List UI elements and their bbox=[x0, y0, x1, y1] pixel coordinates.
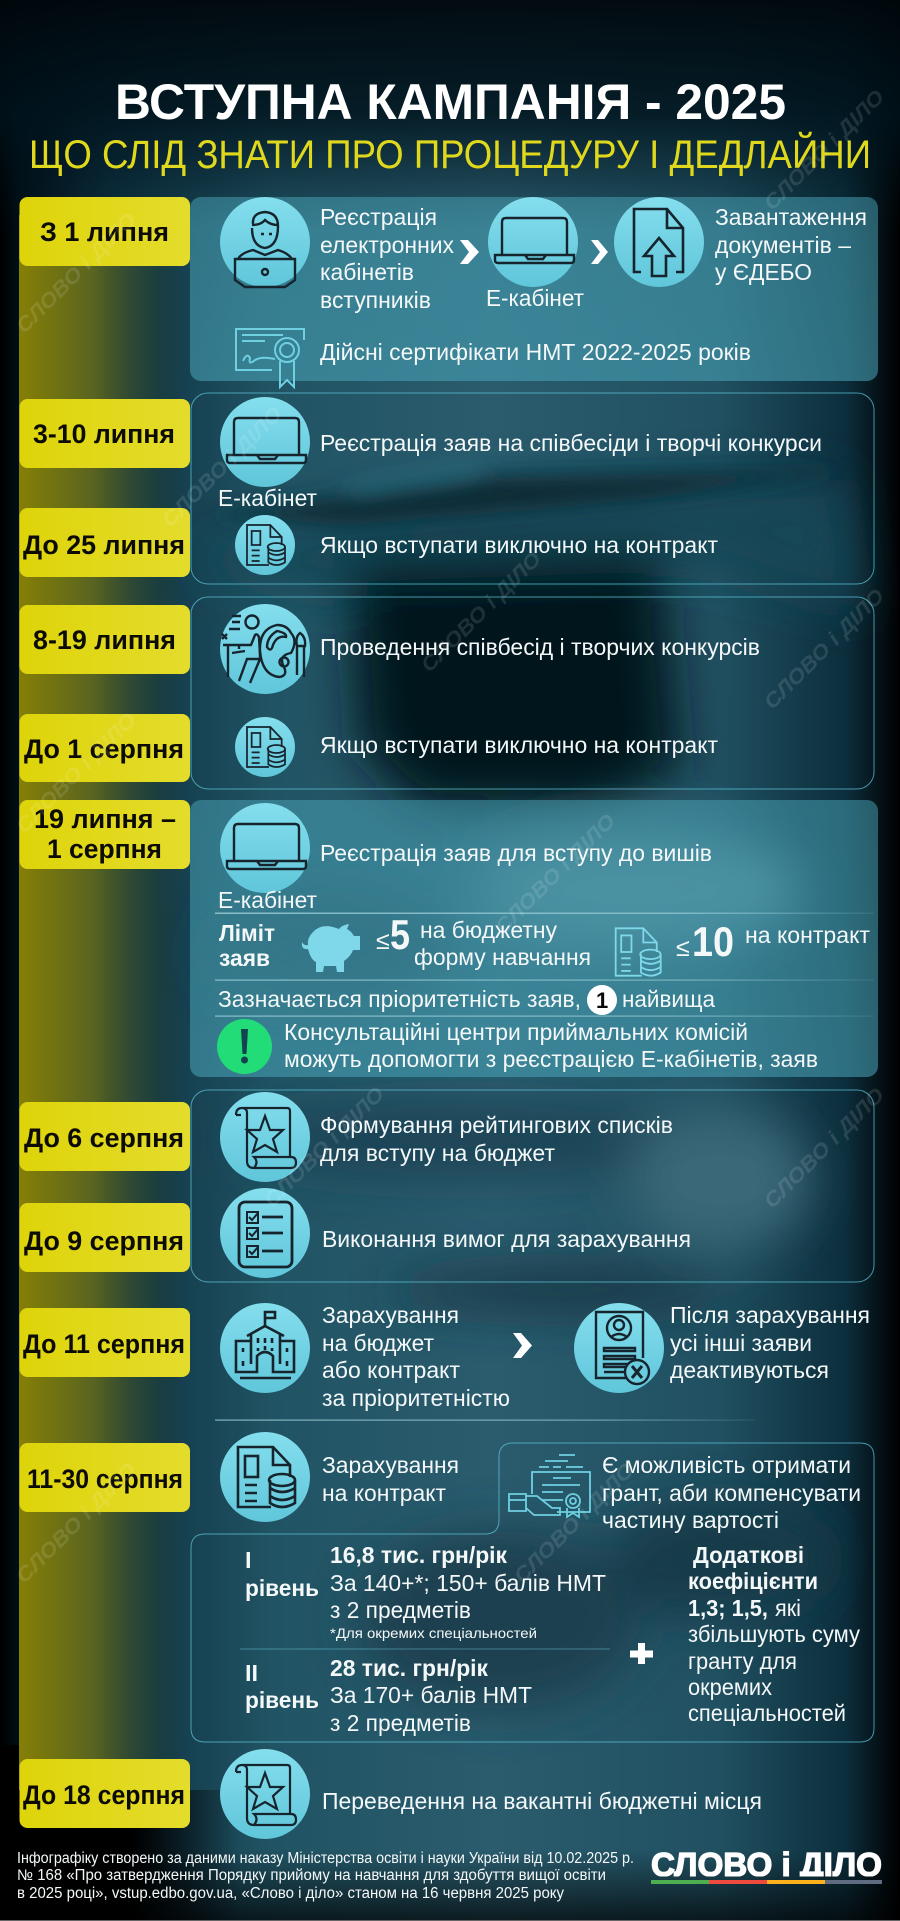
level I: *Для окремих спеціальностей bbox=[330, 1625, 537, 1641]
additional coefficients text: Додаткові bbox=[693, 1542, 804, 1568]
level II bbox=[245, 1655, 532, 1736]
icon: interview and creative contest bbox=[220, 604, 310, 694]
icon: transfer scroll bbox=[220, 1749, 310, 1839]
deactivation text: Після зарахування bbox=[670, 1302, 870, 1328]
priority note: Зазначається пріоритетність заяв, bbox=[218, 986, 581, 1012]
limit: contract: ≤ bbox=[676, 934, 690, 962]
icon: e-cabinet laptop bbox=[220, 397, 310, 487]
ranking text: Формування рейтингових списків bbox=[320, 1112, 673, 1138]
grant text: грант, аби компенсувати bbox=[602, 1480, 861, 1506]
date pills bbox=[20, 197, 190, 1828]
enrolment text: або контракт bbox=[322, 1357, 460, 1383]
divider bbox=[215, 1420, 755, 1421]
watermarks: СЛОВО і ДІЛО bbox=[12, 709, 141, 838]
date labels: 11-30 серпня bbox=[27, 1464, 183, 1494]
deactivation text: деактивуються bbox=[670, 1357, 829, 1383]
date labels: До 25 липня bbox=[23, 530, 185, 560]
requirements text: Виконання вимог для зарахування bbox=[322, 1226, 691, 1252]
dark lower-left corner bbox=[0, 1745, 900, 1921]
registration text: вступників bbox=[320, 287, 431, 313]
icon: checklist bbox=[220, 1188, 310, 1278]
university application text: Реєстрація заяв для вступу до вишів bbox=[320, 840, 712, 866]
icon: university building bbox=[220, 1303, 310, 1393]
grant text bbox=[602, 1452, 861, 1533]
registration text bbox=[320, 204, 454, 313]
contract text: Якщо вступати виключно на контракт bbox=[320, 732, 718, 758]
icon: deactivated application bbox=[574, 1303, 664, 1393]
application limit label: заяв bbox=[219, 945, 270, 971]
priority note: найвища bbox=[622, 986, 716, 1012]
footer source text: в 2025 році», vstup.edbo.gov.ua, «Слово і діло» станом на 16 червня 2025 року bbox=[17, 1885, 564, 1902]
upload text: у ЄДЕБО bbox=[715, 259, 812, 285]
watermarks: СЛОВО і ДІЛО bbox=[760, 1084, 889, 1213]
deactivation text: усі інші заяви bbox=[670, 1330, 812, 1356]
date labels: До 18 серпня bbox=[23, 1780, 185, 1810]
watermarks: СЛОВО і ДІЛО bbox=[510, 1459, 639, 1588]
enrolment text bbox=[322, 1302, 510, 1411]
arrow bbox=[591, 240, 608, 264]
registration text: кабінетів bbox=[320, 259, 414, 285]
budget text: форму навчання bbox=[414, 944, 591, 970]
date labels: До 9 серпня bbox=[24, 1226, 184, 1256]
grant text: Є можливість отримати bbox=[602, 1452, 851, 1478]
date labels: 8-19 липня bbox=[33, 625, 176, 655]
enrolment text: за пріоритетністю bbox=[322, 1385, 510, 1411]
budget text bbox=[414, 917, 591, 970]
footer source text: Інфографіку створено за даними наказу Міністерства освіти і науки України від 10.02.2025 р. bbox=[17, 1850, 634, 1867]
yellow timeline column bbox=[19, 215, 184, 1790]
date labels: 3-10 липня bbox=[33, 419, 175, 449]
contract limit text: на контракт bbox=[745, 922, 870, 948]
footer source text: № 168 «Про затвердження Порядку прийому на навчання для здобуття вищої освіти bbox=[17, 1867, 606, 1884]
creative contest text: Проведення співбесід і творчих конкурсів bbox=[320, 634, 760, 660]
level I: За 140+*; 150+ балів НМТ bbox=[330, 1570, 606, 1596]
registration text: електронних bbox=[320, 232, 454, 258]
arrow bbox=[513, 1333, 532, 1358]
limit: budget bbox=[376, 911, 410, 958]
limit: contract bbox=[676, 918, 734, 965]
watermarks: СЛОВО і ДІЛО bbox=[12, 209, 141, 338]
consulting note: Консультаційні центри приймальних комісій bbox=[284, 1019, 748, 1045]
watermarks: СЛОВО і ДІЛО bbox=[491, 810, 620, 939]
contract text: Якщо вступати виключно на контракт bbox=[320, 532, 718, 558]
priority note bbox=[218, 985, 716, 1015]
level II: з 2 предметів bbox=[330, 1710, 471, 1736]
consulting note: можуть допомогти з реєстрацією Е-кабінетів, заяв bbox=[284, 1046, 818, 1072]
additional coefficients text: коефіцієнти bbox=[688, 1568, 818, 1594]
icon: contract document outline bbox=[616, 928, 661, 976]
enrolment text: Зарахування bbox=[322, 1302, 459, 1328]
date labels: До 1 серпня bbox=[24, 734, 184, 764]
upload text: документів – bbox=[715, 232, 852, 258]
icon: document upload bbox=[614, 197, 704, 287]
date labels: З 1 липня bbox=[40, 217, 169, 247]
limit: contract: 10 bbox=[692, 918, 734, 965]
additional coefficients text: які bbox=[775, 1595, 801, 1621]
level I: з 2 предметів bbox=[330, 1597, 471, 1623]
icon: contract document bbox=[235, 717, 295, 777]
date labels: 1 серпня bbox=[47, 834, 162, 864]
registration text: Реєстрація bbox=[320, 204, 437, 230]
watermarks: СЛОВО і ДІЛО bbox=[417, 548, 546, 677]
watermarks: СЛОВО і ДІЛО bbox=[760, 86, 889, 215]
additional coefficients text: спеціальностей bbox=[688, 1700, 846, 1726]
icon: ranking scroll bbox=[220, 1092, 310, 1182]
icon: contract document bbox=[235, 515, 295, 575]
contract enrolment text: Зарахування bbox=[322, 1452, 459, 1478]
icon: piggy bank bbox=[302, 924, 360, 972]
plus sign bbox=[630, 1643, 653, 1664]
icon: person at laptop bbox=[220, 197, 310, 287]
limit: budget: 5 bbox=[390, 911, 410, 958]
contract enrolment text bbox=[322, 1452, 459, 1506]
icon: e-cabinet laptop bbox=[220, 803, 310, 893]
watermarks bbox=[12, 86, 889, 1588]
additional coefficients text: окремих bbox=[688, 1674, 772, 1700]
date labels: 19 липня – bbox=[34, 804, 176, 834]
panel: outlined panels bbox=[191, 393, 874, 1742]
ranking text: для вступу на бюджет bbox=[320, 1140, 555, 1166]
date labels bbox=[23, 217, 185, 1810]
watermarks: СЛОВО і ДІЛО bbox=[760, 585, 889, 714]
upload text bbox=[715, 204, 867, 285]
e-cabinet label: Е-кабінет bbox=[486, 285, 584, 311]
additional coefficients text: гранту для bbox=[688, 1648, 797, 1674]
icon: certificate bbox=[236, 329, 304, 387]
watermarks: СЛОВО і ДІЛО bbox=[158, 403, 287, 532]
title: ВСТУПНА КАМПАНІЯ - 2025 bbox=[115, 74, 786, 130]
additional coefficients text: 1,3; 1,5, bbox=[688, 1595, 768, 1621]
additional coefficients text: збільшують суму bbox=[688, 1621, 860, 1647]
footer source text bbox=[17, 1850, 634, 1902]
logo: СЛОВО і ДІЛО bbox=[651, 1846, 882, 1883]
panel: filled panels bbox=[190, 197, 878, 1077]
grant text: частину вартості bbox=[602, 1507, 779, 1533]
contract enrolment text: на контракт bbox=[322, 1480, 446, 1506]
e-cabinet label: Е-кабінет bbox=[218, 485, 317, 511]
budget text: на бюджетну bbox=[420, 917, 557, 943]
level II: За 170+ балів НМТ bbox=[330, 1682, 532, 1708]
level I bbox=[245, 1542, 606, 1641]
transfer text: Переведення на вакантні бюджетні місця bbox=[322, 1788, 762, 1814]
enrolment text: на бюджет bbox=[322, 1330, 434, 1356]
arrow bbox=[460, 240, 479, 264]
icon: exclamation bbox=[217, 1019, 272, 1074]
date labels: До 11 серпня bbox=[23, 1329, 185, 1359]
application text: Реєстрація заяв на співбесіди і творчі конкурси bbox=[320, 430, 822, 456]
e-cabinet label: Е-кабінет bbox=[218, 887, 317, 913]
consulting note bbox=[284, 1019, 818, 1072]
level II: 28 тис. грн/рік bbox=[330, 1655, 488, 1681]
application limit label bbox=[219, 920, 275, 971]
panel dividers bbox=[215, 912, 874, 1017]
watermarks: СЛОВО і ДІЛО bbox=[260, 1083, 389, 1212]
certificates text: Дійсні сертифікати НМТ 2022-2025 років bbox=[320, 339, 751, 365]
watermarks: СЛОВО і ДІЛО bbox=[12, 1459, 141, 1588]
level I: рівень bbox=[245, 1575, 319, 1601]
icon: contract document bbox=[220, 1432, 310, 1522]
date labels: До 6 серпня bbox=[24, 1123, 184, 1153]
application limit label: Ліміт bbox=[219, 920, 275, 946]
upload text: Завантаження bbox=[715, 204, 867, 230]
additional coefficients text bbox=[688, 1542, 860, 1726]
deactivation text bbox=[670, 1302, 870, 1383]
level II: II bbox=[245, 1660, 258, 1686]
level II: рівень bbox=[245, 1687, 319, 1713]
icon: grant bbox=[509, 1455, 590, 1517]
limit: budget: ≤ bbox=[376, 927, 390, 955]
level I: I bbox=[245, 1547, 252, 1573]
level I: 16,8 тис. грн/рік bbox=[330, 1542, 507, 1568]
divider bbox=[240, 1648, 610, 1650]
ranking text bbox=[320, 1112, 673, 1166]
icon: e-cabinet laptop bbox=[488, 197, 578, 287]
priority note: 1 bbox=[596, 988, 608, 1013]
